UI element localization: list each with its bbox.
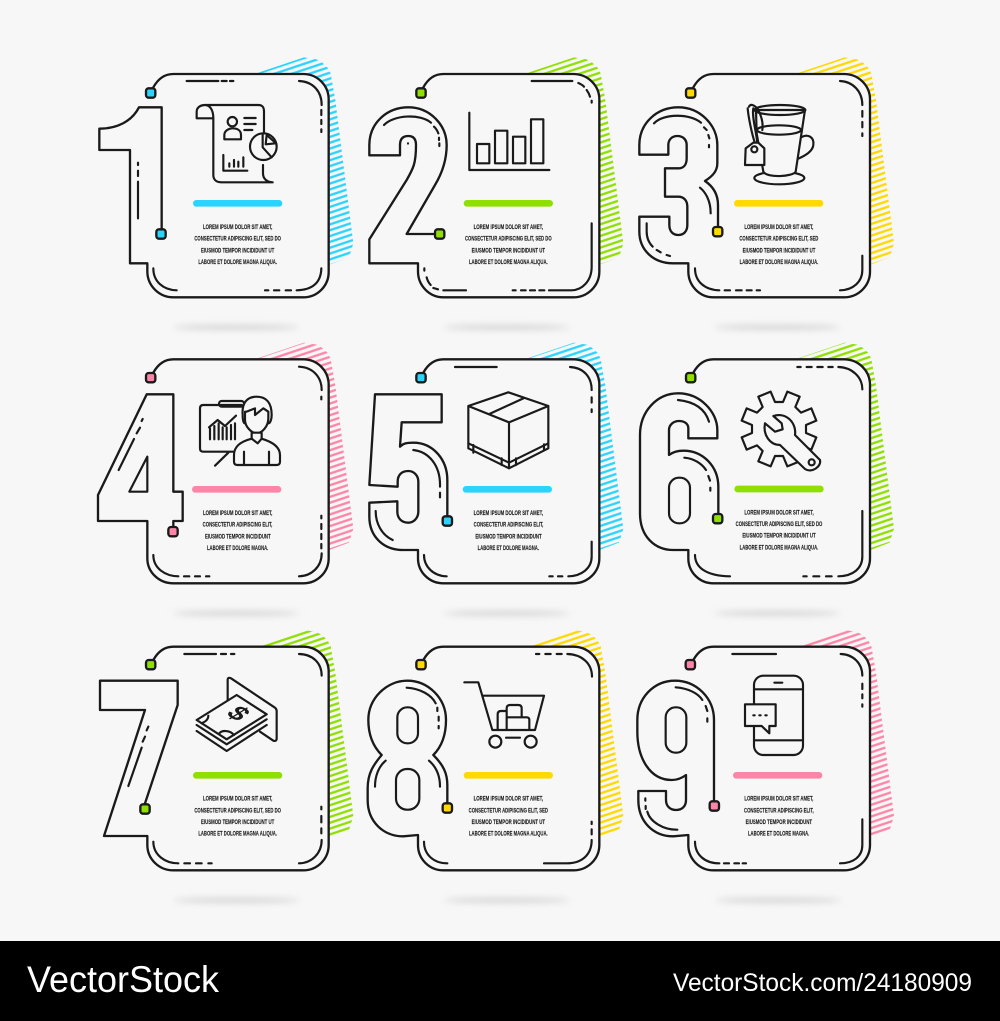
- body text: CONSECTETUR ADIPISCING ELIT,: [203, 522, 272, 529]
- start node: [146, 88, 155, 98]
- body text: LABORE ET DOLORE MAGNA ALIQUA.: [740, 259, 818, 266]
- colour bar: [193, 772, 282, 779]
- icon: box on pallet: [468, 392, 548, 468]
- colour bar: [193, 200, 282, 207]
- body text: LABORE ET DOLORE MAGNA.: [478, 545, 539, 552]
- body text: LOREM IPSUM DOLOR SIT AMET,: [203, 796, 272, 803]
- icon: bar chart: [469, 113, 549, 170]
- icon: cash dispenser: [197, 678, 277, 751]
- start node: [686, 660, 695, 669]
- start node: [146, 373, 155, 382]
- end node: [435, 229, 444, 239]
- frame and numeral 4: [98, 359, 329, 583]
- start node: [416, 88, 426, 98]
- frame and numeral 6: [640, 359, 870, 583]
- panel: step 7: [100, 630, 353, 902]
- end node: [443, 516, 452, 526]
- colour bar: [464, 200, 553, 207]
- icon: presenter with chart board: [200, 397, 280, 466]
- end node: [713, 514, 722, 523]
- body text: LABORE ET DOLORE MAGNA.: [748, 831, 809, 838]
- end node: [713, 227, 722, 236]
- end node: [140, 804, 150, 814]
- icon: shopping cart: [464, 682, 544, 748]
- colour bar: [734, 486, 824, 492]
- panel: step 3: [639, 57, 894, 329]
- colour bar: [734, 200, 823, 207]
- body text: EIUSMOD TEMPOR INCIDIDUNT UT: [472, 247, 545, 254]
- start node: [686, 373, 695, 382]
- body text: EIUSMOD TEMPOR INCIDIDUNT: [475, 533, 542, 540]
- frame and numeral 8: [368, 647, 599, 870]
- body text: [744, 796, 814, 838]
- body text: EIUSMOD TEMPOR INCIDIDUNT UT: [743, 247, 815, 254]
- start node: [146, 660, 155, 669]
- colour bar: [192, 486, 281, 493]
- start node: [416, 373, 426, 382]
- body text: LOREM IPSUM DOLOR SIT AMET,: [474, 224, 543, 231]
- panel: step 6: [640, 343, 894, 615]
- body text: LABORE ET DOLORE MAGNA ALIQUA.: [469, 831, 548, 838]
- colour bar: [464, 772, 553, 779]
- body text: LABORE ET DOLORE MAGNA.: [207, 545, 268, 552]
- frame and numeral 7: [100, 647, 329, 870]
- body text: CONSECTETUR ADIPISCING ELIT, SED: [469, 807, 548, 814]
- icon: report scroll: [197, 105, 277, 182]
- body text: [469, 796, 548, 838]
- body text: CONSECTETUR ADIPISCING ELIT, SED DO: [465, 236, 552, 243]
- icon: tea cup: [745, 105, 813, 184]
- end node: [168, 527, 178, 536]
- body text: LABORE ET DOLORE MAGNA ALIQUA.: [198, 831, 277, 838]
- end node: [710, 801, 719, 811]
- body text: EIUSMOD TEMPOR INCIDIDUNT: [205, 533, 271, 540]
- body text: EIUSMOD TEMPOR INCIDIDUNT UT: [201, 819, 274, 826]
- body text: LOREM IPSUM DOLOR SIT AMET,: [744, 224, 813, 231]
- frame and numeral 3: [639, 74, 870, 297]
- body text: LOREM IPSUM DOLOR SIT AMET,: [474, 510, 543, 517]
- end node: [156, 229, 166, 239]
- frame and numeral 5: [369, 359, 599, 583]
- start node: [416, 660, 426, 669]
- body text: LOREM IPSUM DOLOR SIT AMET,: [203, 510, 272, 517]
- body text: CONSECTETUR ADIPISCING ELIT, SED: [739, 236, 818, 243]
- body text: LOREM IPSUM DOLOR SIT AMET,: [744, 509, 814, 516]
- body text: CONSECTETUR ADIPISCING ELIT, SED DO: [194, 807, 281, 814]
- frame and numeral 2: [369, 74, 599, 297]
- panel: step 1: [99, 57, 353, 329]
- icon: gear and wrench: [742, 392, 820, 470]
- frame and numeral 1: [99, 74, 329, 297]
- panel: step 9: [637, 630, 894, 902]
- icon: cash dispenser: $: [220, 701, 258, 725]
- body text: [739, 224, 818, 266]
- panel: step 5: [369, 343, 623, 615]
- panel: step 2: [369, 57, 623, 329]
- body text: LABORE ET DOLORE MAGNA ALIQUA.: [198, 259, 277, 266]
- end node: [443, 803, 452, 813]
- body text: EIUSMOD TEMPOR INCIDIDUNT UT: [742, 533, 816, 540]
- body text: EIUSMOD TEMPOR INCIDIDUNT: [746, 819, 812, 826]
- body text: CONSECTETUR ADIPISCING ELIT, SED DO: [736, 521, 822, 528]
- body text: EIUSMOD TEMPOR INCIDIDUNT UT: [472, 819, 545, 826]
- body text: EIUSMOD TEMPOR INCIDIDUNT UT: [201, 247, 274, 254]
- body text: LOREM IPSUM DOLOR SIT AMET,: [744, 796, 813, 803]
- body text: [465, 224, 552, 266]
- body text: [194, 224, 281, 266]
- body text: CONSECTETUR ADIPISCING ELIT, SED DO: [194, 236, 281, 243]
- footer watermark bar: [0, 941, 1000, 1021]
- footer watermark bar: VectorStock.com/24180909: [673, 969, 972, 997]
- body text: LABORE ET DOLORE MAGNA ALIQUA.: [740, 544, 818, 551]
- footer watermark bar: VectorStock: [27, 959, 219, 1000]
- body text: [203, 510, 272, 552]
- frame and numeral 9: [637, 647, 870, 870]
- body text: [194, 796, 281, 838]
- body text: CONSECTETUR ADIPISCING ELIT,: [744, 807, 814, 814]
- body text: LABORE ET DOLORE MAGNA ALIQUA.: [469, 259, 548, 266]
- colour bar: [733, 772, 822, 779]
- icon: smartphone with message bubble: [745, 676, 803, 755]
- panel: step 4: [98, 343, 353, 615]
- panel: step 8: [368, 630, 623, 902]
- body text: [474, 510, 543, 552]
- colour bar: [463, 486, 552, 493]
- body text: [736, 509, 822, 551]
- body text: LOREM IPSUM DOLOR SIT AMET,: [474, 796, 543, 803]
- body text: LOREM IPSUM DOLOR SIT AMET,: [203, 224, 272, 231]
- start node: [686, 88, 695, 98]
- body text: CONSECTETUR ADIPISCING ELIT,: [474, 522, 543, 529]
